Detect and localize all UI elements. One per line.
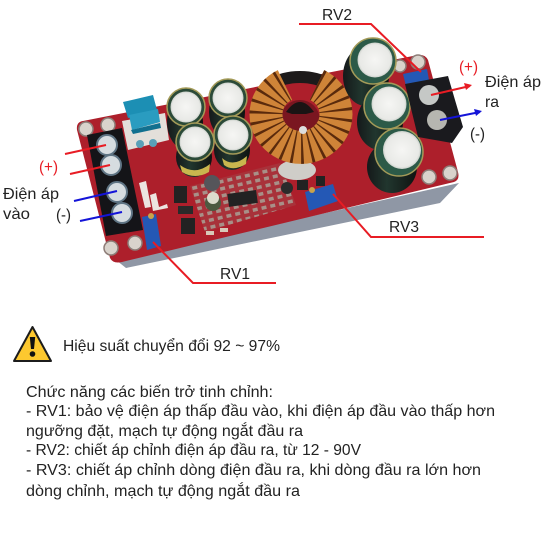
- label: output voltage: Điện áp: [485, 74, 541, 91]
- output terminal block: [405, 76, 463, 143]
- mounting holes: [79, 55, 457, 255]
- blue fuses: [122, 95, 169, 150]
- trimmer functions description: dòng chỉnh, mạch tự động ngắt đầu ra: [26, 481, 300, 500]
- input plus arrows: [65, 145, 110, 174]
- trimmer functions description: - RV1: bảo vệ điện áp thấp đầu vào, khi điện áp đầu vào thấp hơn: [26, 403, 495, 420]
- arrow heads: [464, 83, 482, 116]
- output minus arrow: [440, 112, 480, 120]
- label: input voltage: Điện áp: [3, 186, 59, 203]
- trimmer RV2: [403, 69, 429, 86]
- RV2 leader: [299, 24, 421, 72]
- label: output voltage: [485, 74, 541, 111]
- label: input minus: (-): [56, 207, 71, 224]
- label: output plus: (+): [459, 59, 478, 76]
- trimmer functions description: Chức năng các biến trở tinh chỉnh:: [26, 384, 273, 401]
- small capacitors: [167, 79, 252, 177]
- toroid inductor: [259, 77, 341, 147]
- arrows and leader lines: [65, 24, 484, 283]
- photo: DC-DC boost converter board: [77, 38, 463, 268]
- label: RV2: RV2: [322, 7, 352, 24]
- trimmer functions description: [26, 384, 495, 500]
- icon: warning triangle: [14, 327, 51, 361]
- efficiency note: Hiệu suất chuyển đổi 92 ~ 97%: [63, 337, 280, 355]
- input terminal block: [87, 128, 143, 236]
- control circuit area: [139, 160, 325, 235]
- trimmer functions description: ngưỡng đặt, mạch tự động ngắt đầu ra: [26, 421, 303, 440]
- label: input voltage: vào: [3, 206, 30, 223]
- board grey base: [116, 183, 459, 268]
- label: output voltage: ra: [485, 94, 499, 111]
- label: input plus: (+): [39, 159, 58, 176]
- input minus arrows: [74, 191, 122, 221]
- label: RV3: RV3: [389, 219, 419, 236]
- label: RV1: RV1: [220, 266, 250, 283]
- label: output minus: (-): [470, 126, 485, 143]
- RV3 leader: [333, 194, 484, 237]
- output plus arrow: [431, 86, 470, 95]
- trimmer functions description: - RV3: chiết áp chỉnh dòng điện đầu ra, khi dòng đầu ra lớn hơn: [26, 462, 481, 479]
- trimmer functions description: - RV2: chiết áp chỉnh điện áp đầu ra, từ 12 - 90V: [26, 442, 361, 459]
- large capacitors: [343, 38, 423, 193]
- red circuit board: [77, 55, 458, 262]
- trimmer RV3: [305, 184, 338, 211]
- trimmer RV1: [142, 213, 161, 250]
- label: input voltage: [3, 186, 59, 223]
- RV1 leader: [153, 242, 276, 283]
